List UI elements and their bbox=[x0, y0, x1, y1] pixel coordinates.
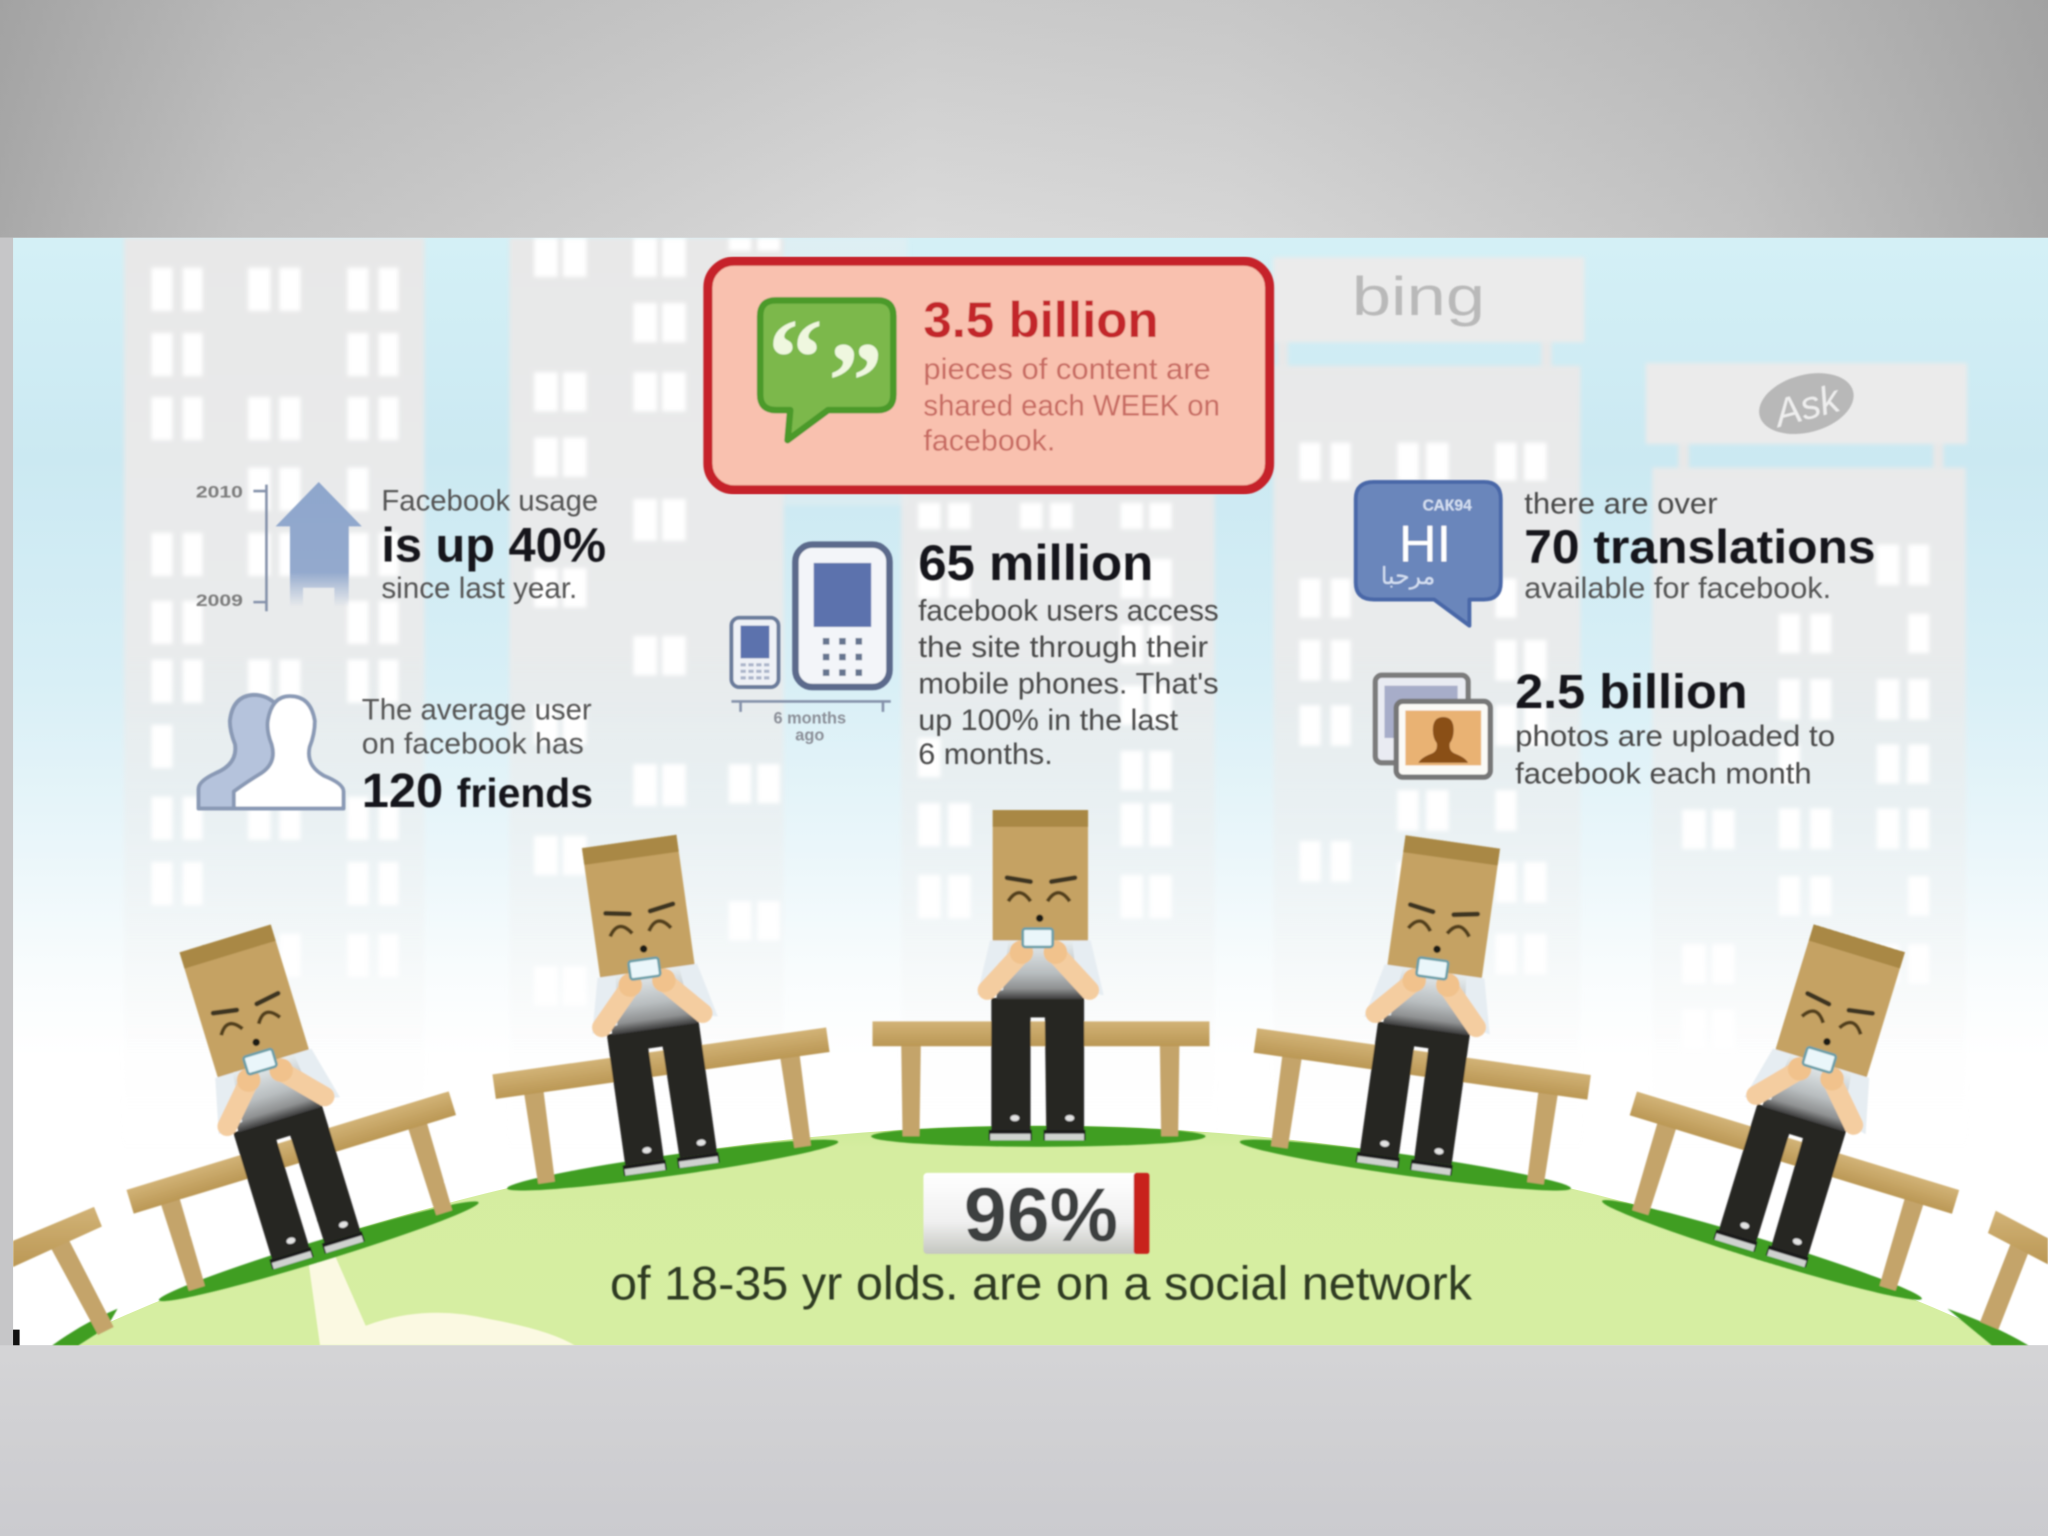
icon: year scale and up arrow: 2009 bbox=[196, 591, 243, 610]
stat: 65 million mobile: 65 million bbox=[918, 535, 1153, 591]
stat: 65 million mobile: up 100% in the last bbox=[918, 704, 1179, 737]
panel: 3.5 billion callout bbox=[708, 261, 1270, 490]
stat: 2.5 billion photos: 2.5 billion bbox=[1515, 665, 1748, 719]
icon: HI speech bubble: САК94 bbox=[1423, 498, 1472, 515]
green hill bbox=[59, 1126, 2018, 1345]
stat: 96% social network bbox=[610, 1173, 1473, 1310]
stat: 120 friends bbox=[199, 694, 593, 818]
bing logo: bing bbox=[1352, 265, 1485, 327]
stat: 96% social network: of 18-35 yr olds. are on a social network bbox=[610, 1257, 1473, 1310]
stat: 65 million mobile: the site through their bbox=[918, 631, 1208, 664]
icon: stacked photos bbox=[1375, 675, 1490, 777]
stat: 65 million mobile: facebook users access bbox=[918, 594, 1219, 627]
people on benches bbox=[13, 810, 2048, 1345]
Ask logo: Ask bbox=[1768, 377, 1847, 436]
stat: 70 translations: 70 translations bbox=[1524, 520, 1876, 573]
stat: 65 million mobile: 6 months. bbox=[918, 738, 1053, 771]
stat: Facebook usage up 40%: since last year. bbox=[381, 572, 577, 605]
stat: 2.5 billion photos bbox=[1375, 665, 1835, 791]
black corner mark bbox=[13, 1330, 20, 1345]
icon: green quote bubble: “ bbox=[768, 296, 823, 418]
stat: 65 million mobile: mobile phones. That's bbox=[918, 668, 1219, 701]
icon: HI speech bubble bbox=[1356, 482, 1501, 626]
stat: 120 friends: The average user bbox=[362, 694, 592, 727]
person 2 bbox=[492, 834, 839, 1192]
person 1 bbox=[126, 924, 480, 1302]
text: content description bbox=[923, 353, 1220, 458]
icon: friends silhouettes bbox=[199, 695, 344, 808]
stat: 65 million mobile bbox=[731, 535, 1219, 771]
stat: 70 translations bbox=[1356, 482, 1876, 626]
speech light spot bbox=[307, 1251, 575, 1345]
text: content description: pieces of content are bbox=[923, 353, 1211, 386]
far left bench bbox=[13, 1207, 118, 1345]
icon: year scale and up arrow: 2010 bbox=[196, 483, 243, 502]
stat: Facebook usage up 40%: Facebook usage bbox=[381, 485, 598, 518]
stat: 120 friends: on facebook has bbox=[362, 728, 584, 761]
icon: HI speech bubble: مرحبا bbox=[1381, 562, 1435, 590]
stat: 70 translations: available for facebook. bbox=[1524, 572, 1831, 605]
city buildings bbox=[123, 238, 1968, 960]
text: 3.5 billion: 3.5 billion bbox=[923, 292, 1159, 348]
stat: 2.5 billion photos: facebook each month bbox=[1515, 758, 1812, 791]
far right bench bbox=[1947, 1211, 2048, 1345]
icon: small and large phones: ago bbox=[795, 727, 824, 745]
picture panel bbox=[13, 238, 2048, 1345]
text: content description: shared each WEEK on bbox=[923, 389, 1220, 422]
percentage box bbox=[923, 1173, 1149, 1258]
icon: green quote bubble bbox=[760, 296, 893, 442]
icon: green quote bubble: ” bbox=[828, 320, 883, 442]
percentage box: 96% bbox=[964, 1173, 1118, 1258]
text: content description: facebook. bbox=[923, 425, 1055, 458]
Ask logo bbox=[1758, 372, 1854, 434]
icon: year scale and up arrow bbox=[196, 482, 362, 611]
stat: 2.5 billion photos: photos are uploaded to bbox=[1515, 720, 1835, 753]
person 3 bbox=[871, 810, 1209, 1147]
stat: Facebook usage up 40% bbox=[196, 482, 606, 611]
person 4 bbox=[1239, 834, 1592, 1192]
icon: small and large phones: 6 months bbox=[774, 710, 846, 728]
person 5 bbox=[1601, 924, 1960, 1301]
stat: 70 translations: there are over bbox=[1524, 487, 1718, 520]
stat: 120 friends: 120 friends bbox=[362, 764, 593, 818]
stat: Facebook usage up 40%: is up 40% bbox=[381, 519, 606, 573]
icon: HI speech bubble: HI bbox=[1399, 516, 1451, 574]
icon: small and large phones bbox=[731, 545, 891, 745]
sky bbox=[13, 238, 2048, 1345]
